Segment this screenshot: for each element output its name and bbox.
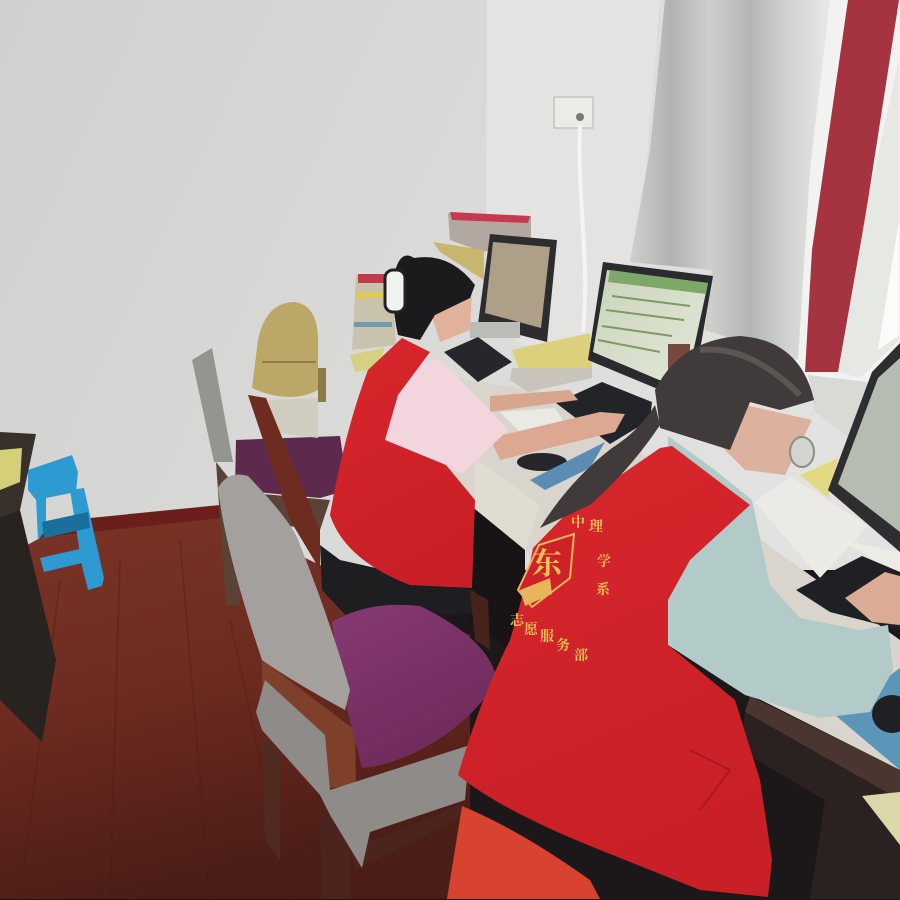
hand xyxy=(845,572,900,625)
vest text lower: 愿 xyxy=(524,621,539,638)
back keyboard xyxy=(444,337,512,382)
red vest xyxy=(458,446,772,897)
shirt and arm xyxy=(665,436,893,718)
vest text upper: 理 xyxy=(589,519,603,535)
right keyboard xyxy=(796,556,900,630)
face xyxy=(720,405,812,475)
vest text upper: 系 xyxy=(596,581,611,598)
person 2: woman in front xyxy=(458,336,900,897)
window frame xyxy=(795,0,900,400)
vest text lower: 志 xyxy=(510,612,525,629)
vest emblem xyxy=(518,534,574,607)
red window panel xyxy=(805,0,899,372)
glasses xyxy=(790,437,814,467)
yellow paper bottom right xyxy=(862,792,900,845)
ponytail xyxy=(540,405,660,528)
pink shirt xyxy=(385,360,508,474)
vest text upper xyxy=(571,514,611,598)
vest text lower xyxy=(510,612,588,664)
orange stool foreground xyxy=(447,806,600,899)
wood floor xyxy=(0,518,480,899)
legs xyxy=(262,740,280,860)
vest emblem: 东 xyxy=(532,548,564,581)
main monitor xyxy=(588,262,713,392)
vest pocket xyxy=(690,750,730,810)
chair frame xyxy=(262,660,356,788)
vest text lower: 部 xyxy=(574,647,588,664)
window bright pane xyxy=(838,60,899,378)
purple cushion xyxy=(332,605,497,768)
desk xyxy=(350,360,900,899)
grey seat skirt xyxy=(256,680,470,868)
middle chair with dark seat xyxy=(248,395,490,650)
tan backpack and books xyxy=(252,302,326,438)
hair xyxy=(655,336,814,450)
vest text upper: 学 xyxy=(597,553,611,570)
vest text lower: 务 xyxy=(556,637,570,654)
vest text upper: 中 xyxy=(571,514,585,531)
window and curtain area xyxy=(630,0,900,445)
left cabinet and stool xyxy=(0,432,104,742)
red vest xyxy=(330,338,475,588)
vest text lower: 服 xyxy=(540,629,554,645)
front chair xyxy=(218,474,497,899)
wall socket and cable xyxy=(554,97,593,332)
papers and mousepad on desk xyxy=(500,408,900,578)
hair xyxy=(393,256,475,340)
dark under-desk area xyxy=(470,600,900,899)
wall background xyxy=(0,0,900,570)
arm xyxy=(490,390,578,412)
yellow notebook stack xyxy=(350,333,592,392)
right edge monitor xyxy=(828,343,900,552)
grey backrest xyxy=(218,474,350,710)
back chair xyxy=(192,348,348,605)
skirting board xyxy=(40,505,222,538)
wall section right xyxy=(486,0,660,345)
right mouse xyxy=(872,695,900,733)
face xyxy=(430,290,472,342)
back monitor xyxy=(470,234,557,342)
book stacks xyxy=(352,212,531,350)
floor planks xyxy=(20,540,290,899)
main keyboard xyxy=(556,382,652,444)
mouse xyxy=(517,453,567,471)
window sill xyxy=(808,375,868,445)
curtain xyxy=(630,0,830,360)
blue stool xyxy=(28,455,104,590)
person 1: woman in back xyxy=(330,256,625,588)
